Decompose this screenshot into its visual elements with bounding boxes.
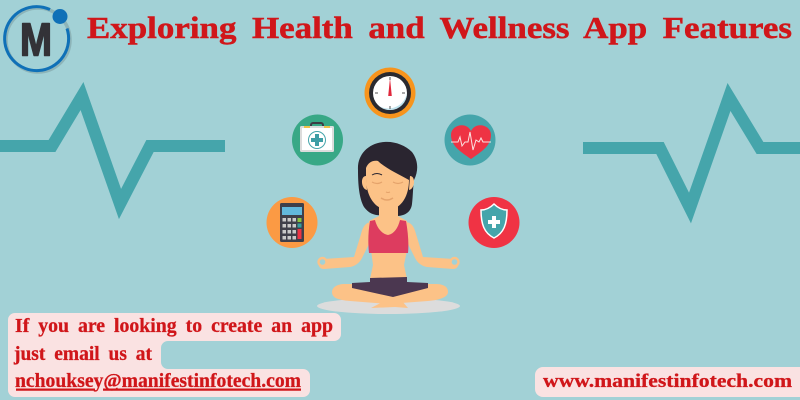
website label	[535, 367, 800, 397]
legs	[332, 284, 448, 304]
ears	[362, 176, 414, 190]
hands	[318, 258, 326, 266]
website label: www.manifestinfotech.com	[543, 371, 792, 392]
callout: email contact	[8, 313, 341, 397]
top	[368, 220, 408, 253]
icon: calculator	[266, 197, 318, 248]
nose	[386, 191, 390, 194]
shorts	[352, 277, 428, 297]
logo: Manifest Infotech: M	[20, 14, 52, 66]
smile	[381, 198, 393, 200]
title: Exploring Health and Wellness App Features	[87, 10, 792, 45]
eyebrow	[372, 174, 382, 175]
ground shadow	[317, 298, 460, 314]
neck and chest	[369, 205, 407, 243]
face	[366, 161, 409, 210]
meditating woman	[318, 142, 458, 308]
eyes	[372, 182, 403, 184]
icon: shield	[468, 197, 520, 248]
logo: Manifest Infotech	[5, 7, 70, 72]
callout: email contact: nchouksey@manifestinfotech.com	[15, 371, 301, 392]
pulse line: right	[583, 97, 800, 208]
pulse line: left	[0, 96, 225, 204]
callout: email contact: If you are looking to create an app	[15, 316, 333, 337]
icon: heart with pulse	[444, 114, 496, 166]
icon: clock	[364, 68, 416, 118]
callout: email contact: just email us at	[13, 344, 152, 365]
feet	[371, 297, 408, 308]
waist	[370, 250, 407, 279]
arms	[319, 222, 372, 269]
hair back	[358, 142, 417, 216]
icon: first aid kit	[292, 114, 343, 166]
